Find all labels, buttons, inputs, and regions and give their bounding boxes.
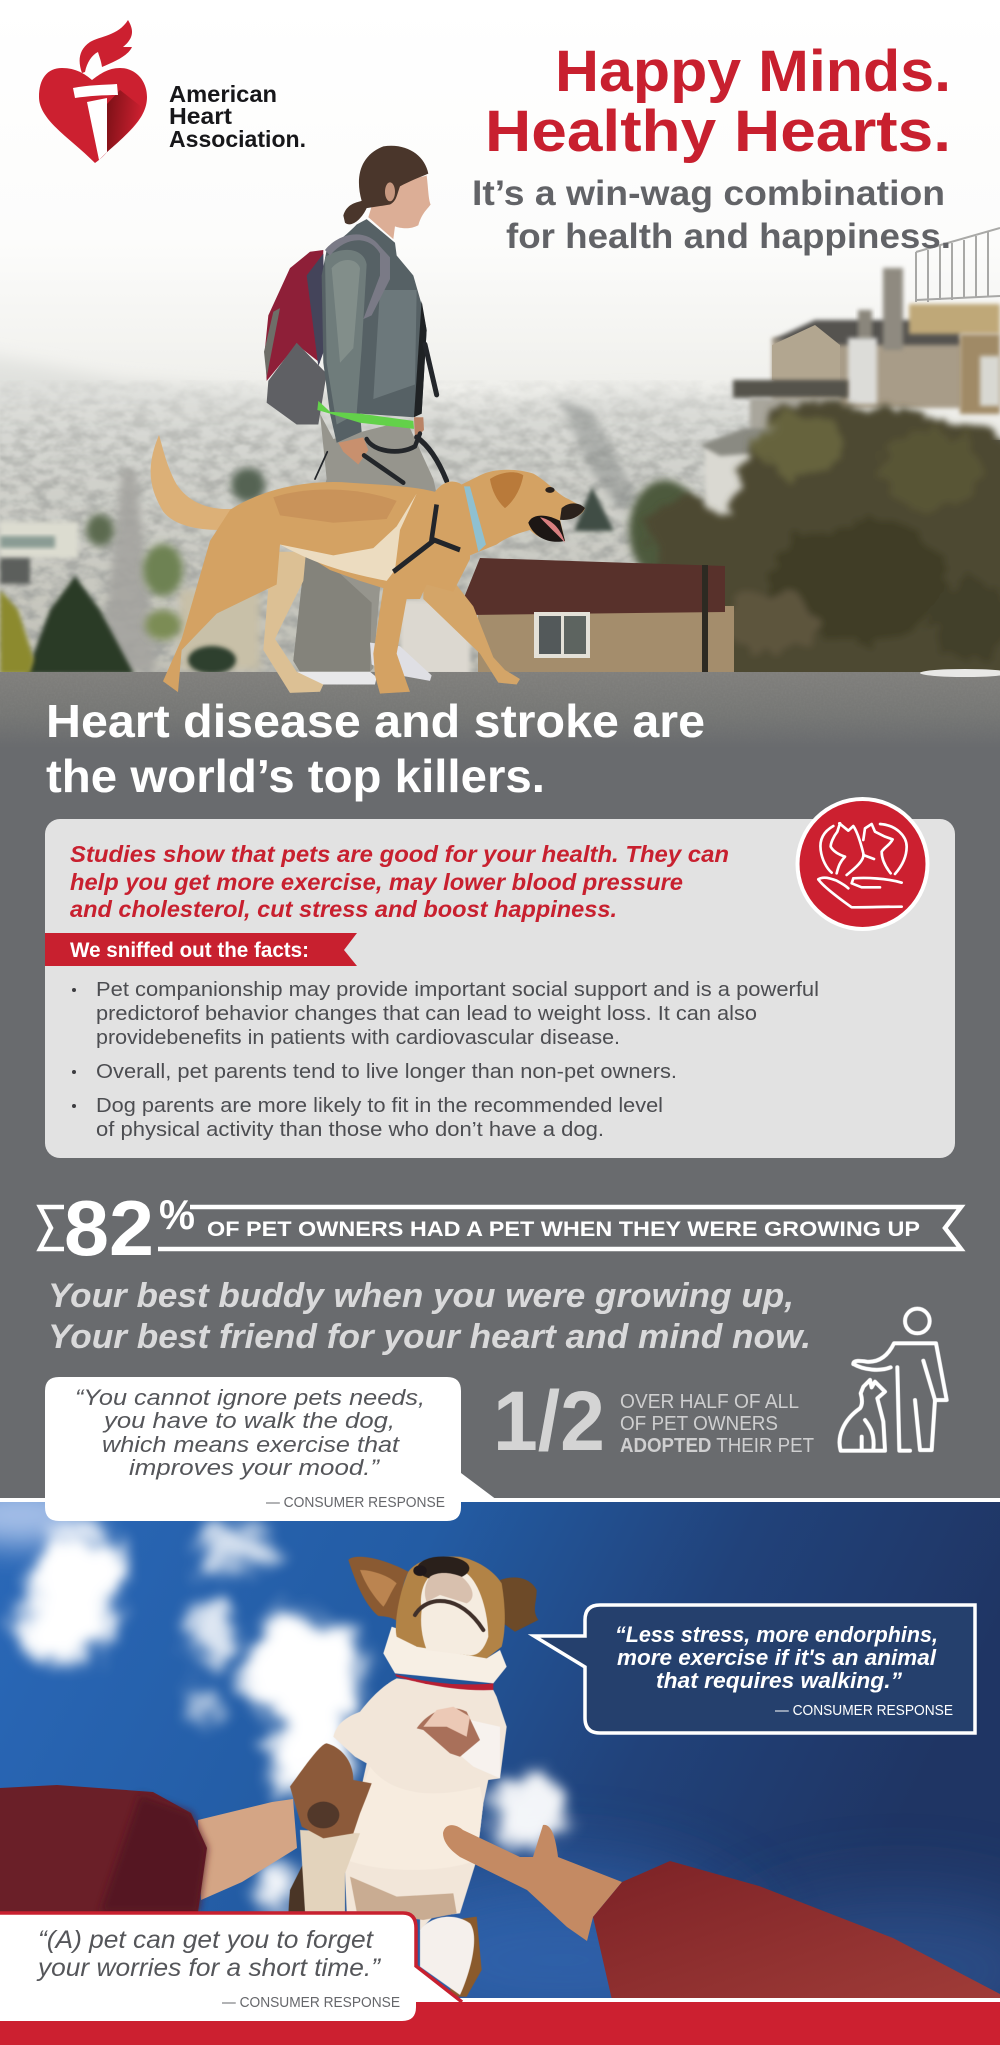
stat: one half adopted: OF PET OWNERS [620, 1413, 778, 1435]
road [0, 669, 1000, 732]
bullet list: Dog parents are more likely to fit in the recommended level [96, 1094, 663, 1117]
logo wordmark: Heart [169, 103, 232, 129]
trees in city [0, 468, 701, 674]
divider lines [0, 1498, 1000, 1502]
stat: 82%: 82 [64, 1184, 154, 1272]
panel: pet health facts [45, 797, 955, 1158]
callout: less stress quote: — CONSUMER RESPONSE [775, 1703, 953, 1719]
title: Healthy Hearts. [485, 99, 951, 164]
callout: forget your worries quote: your worries for a short time.” [36, 1954, 382, 1982]
heading: best buddy [48, 1277, 811, 1356]
ribbon: we sniffed out the facts [45, 933, 357, 966]
dog [151, 435, 585, 694]
subtitle [472, 174, 951, 256]
stat: 82% [64, 1184, 195, 1272]
callout: exercise quote: you have to walk the dog, [102, 1408, 395, 1433]
callout: exercise quote: — CONSUMER RESPONSE [266, 1495, 445, 1511]
intro text: help you get more exercise, may lower blood pressure [70, 869, 683, 895]
logo wordmark [169, 81, 306, 152]
icon: person petting dog [840, 1309, 947, 1451]
callout: less stress quote: “Less stress, more endorphins, [615, 1622, 938, 1647]
buildings at right [700, 228, 1000, 583]
clouds [16, 1524, 566, 1909]
sleeve: left arm [0, 1785, 297, 1912]
foreground house [459, 558, 734, 676]
intro text: and cholesterol, cut stress and boost happiness. [70, 896, 617, 922]
icon: heart and torch [39, 20, 147, 163]
icon: hand holding pets in heart [796, 797, 930, 931]
callout: forget your worries quote [0, 1913, 462, 2021]
heading: heart disease [46, 695, 705, 802]
photo: woman walking dog above city [0, 0, 1000, 748]
title: Happy Minds. [555, 39, 951, 104]
icon: flame [80, 20, 132, 73]
callout: exercise quote: “You cannot ignore pets needs, [75, 1385, 425, 1410]
intro text: Studies show that pets are good for your health. They can [70, 841, 729, 867]
tree at right [640, 400, 1000, 690]
woman and dog [151, 146, 585, 694]
woman [264, 146, 447, 684]
callout: less stress quote: that requires walking.” [656, 1668, 902, 1693]
logo wordmark: Association. [169, 126, 306, 152]
subtitle: It’s a win-wag combination [472, 174, 945, 213]
ribbon: we sniffed out the facts: We sniffed out the facts: [70, 939, 309, 962]
callout: exercise quote: improves your mood.” [129, 1455, 381, 1480]
banner text: OF PET OWNERS HAD A PET WHEN THEY WERE GROWING UP [207, 1218, 920, 1241]
heading: heart disease: the world’s top killers. [46, 750, 545, 802]
body and head [163, 470, 585, 694]
stat: one half adopted: OVER HALF OF ALL [620, 1391, 799, 1413]
heading: heart disease: Heart disease and stroke are [46, 695, 705, 747]
intro text [70, 841, 729, 922]
logo wordmark: American [169, 81, 277, 107]
photo: dog jumping against blue sky [0, 1502, 1000, 1998]
callout: forget your worries quote: “(A) pet can get you to forget [38, 1926, 374, 1954]
bullet list: of physical activity than those who don’t have a dog. [96, 1118, 604, 1141]
bullet list: predictorof behavior changes that can lead to weight loss. It can also [96, 1002, 757, 1025]
callout: forget your worries quote: — CONSUMER RESPONSE [222, 1995, 400, 2011]
title [485, 39, 951, 164]
stat: one half adopted: 1/2 [493, 1374, 605, 1468]
stat: 82%: % [159, 1191, 195, 1238]
logo: American Heart Association [39, 20, 306, 163]
sky light [0, 1502, 1000, 1998]
bullet list: providebenefits in patients with cardiovascular disease. [96, 1026, 620, 1049]
heading: best buddy: Your best friend for your heart and mind now. [48, 1318, 811, 1356]
tail [151, 435, 240, 530]
bullet list: Overall, pet parents tend to live longer than non-pet owners. [96, 1060, 677, 1083]
stat: one half adopted: ADOPTED THEIR PET [620, 1435, 814, 1457]
callout: exercise quote: which means exercise that [102, 1432, 400, 1457]
sleeve: right arm [443, 1825, 1000, 2000]
callout: less stress quote [534, 1605, 975, 1733]
subtitle: for health and happiness. [506, 217, 951, 256]
bullet list: Pet companionship may provide important social support and is a powerful [96, 978, 819, 1001]
callout: exercise quote [45, 1377, 507, 1521]
footer bar [0, 1998, 1000, 2045]
banner: 82 percent [40, 1184, 961, 1272]
callout: less stress quote: more exercise if it's an animal [617, 1645, 937, 1670]
ribbon outline [40, 1207, 961, 1249]
far legs [263, 552, 323, 693]
stat: one half adopted [493, 1374, 814, 1468]
heading: best buddy: Your best buddy when you were growing up, [48, 1277, 794, 1315]
bullet list [72, 978, 819, 1141]
blurred city skyline [0, 359, 752, 672]
dog [288, 1556, 538, 1997]
